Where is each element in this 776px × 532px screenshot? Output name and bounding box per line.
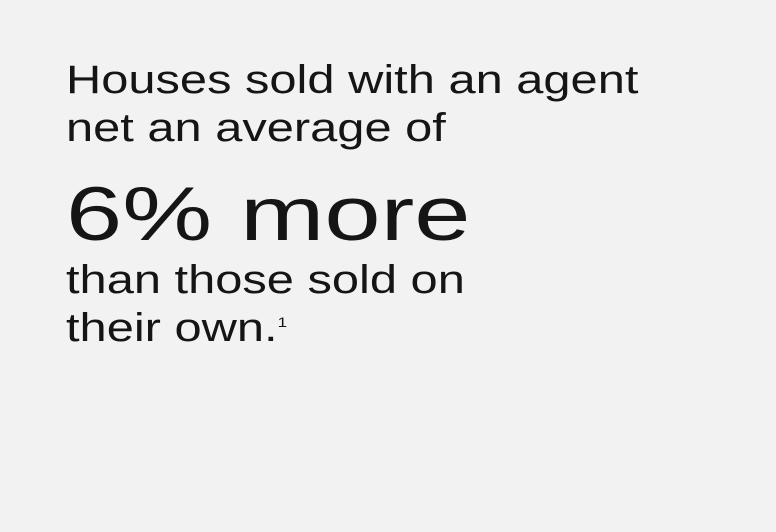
- text block: intro: net an average of: [66, 106, 446, 150]
- text block: intro: Houses sold with an agent: [66, 58, 638, 102]
- text block: conclusion: [66, 258, 465, 350]
- text block: conclusion: their own.1: [66, 306, 287, 350]
- text block: intro: [66, 58, 638, 150]
- headline: 6% more: 6% more: [66, 172, 470, 257]
- text block: conclusion: than those sold on: [66, 258, 465, 302]
